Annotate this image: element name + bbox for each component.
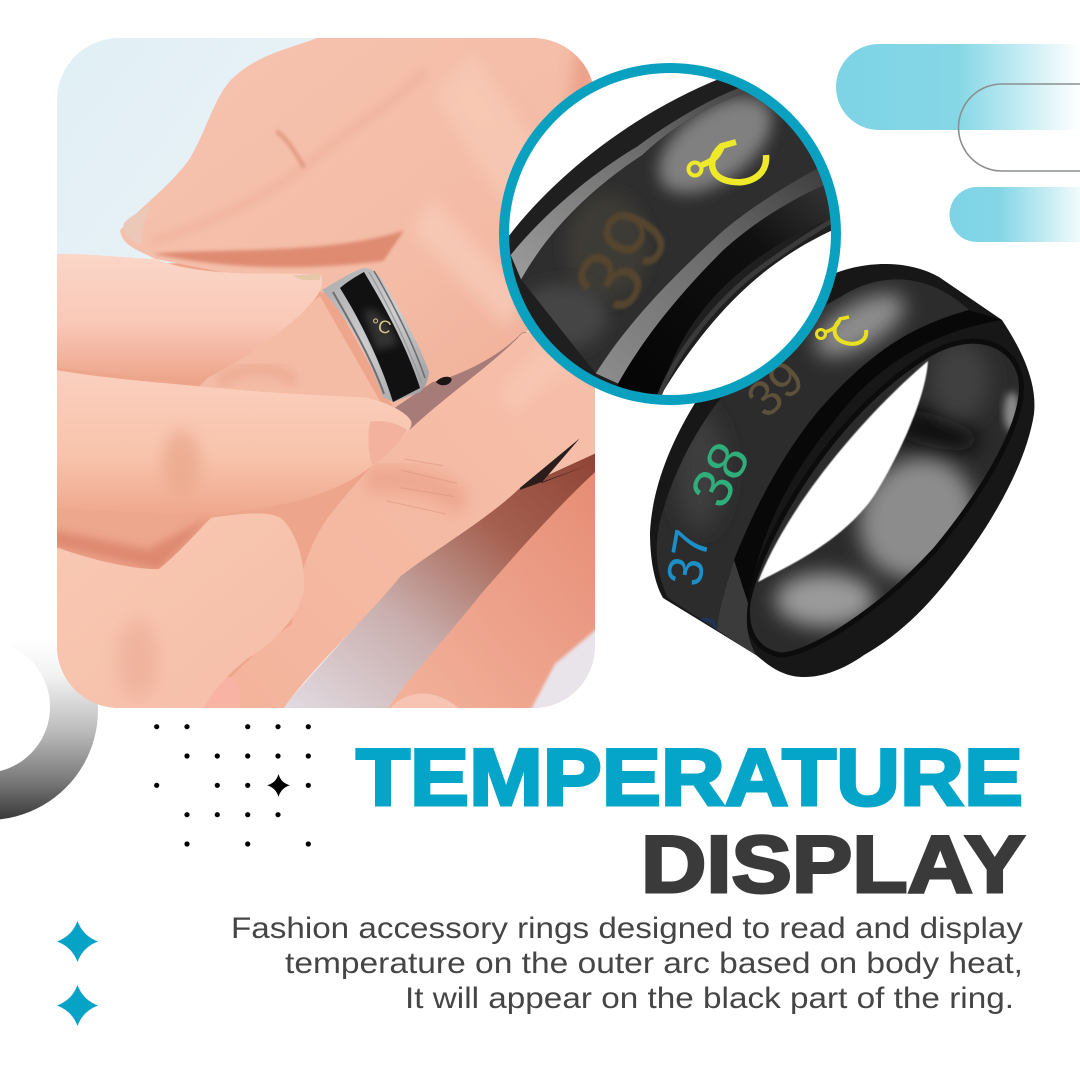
title: [356, 733, 1025, 910]
upper hand back: [120, 37, 597, 408]
inset black bevel: [618, 186, 830, 394]
white opening and reflections: [758, 340, 1020, 627]
icon: teal sparkle top: [57, 921, 98, 962]
front finger three: [50, 513, 304, 717]
yellow degree symbol: [816, 317, 866, 344]
inset lower bevel: [596, 169, 824, 384]
small dark spot: [436, 377, 452, 385]
top right decorative pills: [836, 44, 1080, 242]
inset bright strip: [510, 88, 746, 280]
inset band highlight: [517, 77, 787, 349]
inner wall: [747, 341, 1021, 655]
main black temperature ring: [650, 264, 1034, 677]
inset faded number 39: 39: [555, 191, 691, 328]
faded blue number 36: 36: [667, 609, 728, 670]
inset white opening: [667, 212, 872, 406]
shadow under fingers: [50, 508, 211, 570]
title: DISPLAY: [641, 820, 1025, 910]
temperature number 37: 37: [656, 525, 720, 590]
icon: black sparkle: [267, 774, 290, 797]
temperature number 38: 38: [678, 432, 762, 516]
title: TEMPERATURE: [356, 733, 1023, 823]
right edge warm shading: [566, 52, 592, 98]
inset teal border: [504, 68, 836, 400]
lower hand finger: [232, 332, 595, 708]
grey gradient ring: [0, 600, 98, 820]
nail of top finger: [123, 206, 150, 246]
shadow above front finger: [152, 230, 404, 267]
zoomed circle inset: [499, 63, 841, 405]
description text: temperature on the outer arc based on body heat,: [285, 947, 1023, 980]
lower gap shading: [275, 452, 597, 717]
inset yellow degree symbol: [688, 142, 766, 182]
degree celsius label on ring: °C: [369, 314, 393, 338]
display band: [657, 279, 969, 630]
dark mark on finger: [520, 438, 587, 490]
lower bevel: [717, 310, 1002, 655]
inset ring body: [509, 80, 831, 391]
description text: Fashion accessory rings designed to read and display: [231, 912, 1023, 945]
dot pattern: [154, 724, 311, 847]
description text: It will appear on the black part of the ring.: [405, 982, 1014, 1015]
front finger one: [50, 254, 322, 379]
description text: [231, 912, 1023, 1015]
inset display band: [521, 92, 817, 373]
bottom middle fingertip: [204, 677, 238, 708]
dark rim ring: [747, 341, 1021, 655]
photo: hands with ring: [50, 37, 597, 717]
front finger two: [57, 370, 412, 504]
bottom right finger: [383, 470, 597, 717]
top finger soft edge: [152, 70, 425, 241]
ring worn on finger: [322, 268, 429, 402]
icon: teal sparkle bottom: [57, 985, 98, 1026]
outer silhouette: [650, 264, 1034, 677]
faded number 39: 39: [736, 349, 815, 428]
inset rim line: [657, 219, 830, 395]
finger under the ring: [200, 296, 380, 402]
sliver between fingers: [395, 332, 527, 430]
band highlight: [667, 281, 914, 670]
